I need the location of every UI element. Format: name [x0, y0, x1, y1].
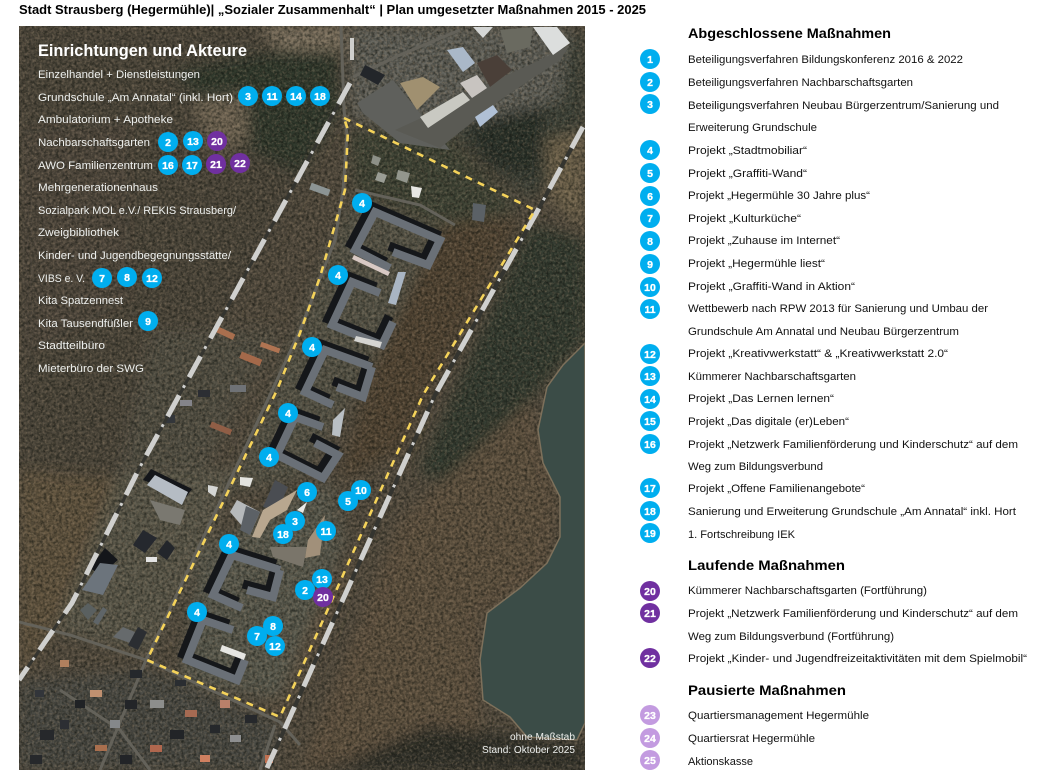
west commercial buildings — [80, 469, 192, 650]
item 16 — [640, 434, 1018, 473]
item 21 — [640, 603, 1018, 643]
item 24 — [640, 728, 815, 748]
item 24: Quartiersrat Hegermühle — [688, 733, 815, 745]
item 9: Projekt „Hegermühle liest“ — [688, 258, 825, 270]
item 17: Projekt „Offene Familienangebote“ — [688, 483, 865, 495]
item 11: 11 — [644, 304, 656, 316]
item 24: 24 — [644, 733, 656, 745]
item 19 — [640, 523, 796, 543]
item 4 — [640, 140, 807, 160]
facility badges: 16 — [162, 160, 174, 172]
item 8: Projekt „Zuhause im Internet“ — [688, 235, 840, 247]
residential blocks — [183, 155, 486, 680]
item 19: 1. Fortschreibung IEK — [688, 529, 796, 541]
item 11 — [640, 299, 988, 338]
item 11: Wettbewerb nach RPW 2013 für Sanierung und Umbau der — [688, 303, 988, 315]
facility badges: 13 — [187, 136, 199, 148]
item 10: Projekt „Graffiti-Wand in Aktion“ — [688, 281, 855, 293]
item 25: Aktionskasse — [688, 756, 753, 768]
map markers: 12 — [269, 641, 281, 653]
item 3: Erweiterung Grundschule — [688, 122, 817, 134]
facility list: Einzelhandel + Dienstleistungen — [38, 69, 200, 81]
panel: paused measures — [640, 682, 869, 770]
panel: aerial map — [19, 26, 585, 770]
map markers: 4 — [194, 607, 200, 619]
item 13 — [640, 366, 856, 386]
facility badges: 20 — [211, 136, 223, 148]
item 22: 22 — [644, 653, 656, 665]
facility list: Mieterbüro der SWG — [38, 363, 144, 375]
map markers: 20 — [317, 592, 329, 604]
item 23 — [640, 705, 869, 725]
item 21: 21 — [644, 608, 656, 620]
item 7: Projekt „Kulturküche“ — [688, 213, 801, 225]
item 12: Projekt „Kreativwerkstatt“ & „Kreativwerkstatt 2.0“ — [688, 348, 948, 360]
item 2: 2 — [647, 77, 653, 89]
facility badges: 21 — [210, 159, 222, 171]
facility badges: 17 — [186, 160, 198, 172]
map markers: 4 — [266, 452, 272, 464]
facility badges — [92, 86, 330, 331]
roads — [19, 26, 460, 770]
item 3: 3 — [647, 99, 653, 111]
heading: Pausierte Maßnahmen: Pausierte Maßnahmen — [688, 682, 846, 698]
heading: Einrichtungen und Akteure: Einrichtungen und Akteure — [38, 42, 247, 60]
item 20 — [640, 581, 927, 601]
facility list: Kita Spatzennest — [38, 295, 123, 307]
heading: Abgeschlossene Maßnahmen: Abgeschlossene Maßnahmen — [688, 25, 891, 41]
map note: Stand: Oktober 2025 — [482, 745, 575, 756]
item 12 — [640, 344, 948, 364]
facility list: Nachbarschaftsgarten — [38, 137, 150, 149]
item 6: Projekt „Hegermühle 30 Jahre plus“ — [688, 190, 870, 202]
facility badges: 12 — [146, 273, 158, 285]
item 8 — [640, 231, 840, 251]
facility badges: 8 — [124, 272, 130, 284]
item 3 — [640, 94, 999, 134]
item 13: Kümmerer Nachbarschaftsgarten — [688, 371, 856, 383]
facility list: Mehrgenerationenhaus — [38, 182, 159, 194]
facility list: Kita Tausendfüßler — [38, 318, 133, 330]
panel: ongoing measures — [640, 557, 1027, 668]
facility list: Ambulatorium + Apotheke — [38, 114, 173, 126]
item 10 — [640, 277, 855, 297]
item 16: Projekt „Netzwerk Familienförderung und Kinderschutz“ auf dem — [688, 439, 1018, 451]
item 5: Projekt „Graffiti-Wand“ — [688, 168, 807, 180]
map markers: 7 — [254, 631, 260, 643]
item 13: 13 — [644, 371, 656, 383]
item 18: Sanierung und Erweiterung Grundschule „Am Annatal“ inkl. Hort — [688, 506, 1016, 518]
panel: completed measures — [640, 25, 1018, 543]
facility list: Zweigbibliothek — [38, 227, 120, 239]
item 10: 10 — [644, 282, 656, 294]
facility list: VIBS e. V. — [38, 273, 85, 285]
facility badges: 3 — [245, 91, 251, 103]
heading: Laufende Maßnahmen: Laufende Maßnahmen — [688, 557, 845, 573]
map markers: 5 — [345, 496, 351, 508]
item 14 — [640, 389, 834, 409]
item 4: 4 — [647, 145, 653, 157]
facility badges: 2 — [165, 137, 171, 149]
item 6 — [640, 186, 870, 206]
facility badges: 22 — [234, 158, 246, 170]
facility list: Kinder- und Jugendbegegnungsstätte/ — [38, 250, 232, 262]
central school and shops — [208, 477, 325, 567]
map markers: 10 — [355, 485, 367, 497]
facility list: Grundschule „Am Annatal“ (inkl. Hort) — [38, 92, 233, 104]
item 25 — [640, 750, 753, 770]
lake — [480, 343, 585, 740]
settlements — [30, 326, 280, 764]
item 7: 7 — [647, 213, 653, 225]
map markers: 8 — [270, 621, 276, 633]
facility list — [38, 69, 237, 375]
facility list: Stadtteilbüro — [38, 340, 105, 352]
facility list: Sozialpark MOL e.V./ REKIS Strausberg/ — [38, 205, 237, 217]
facility badges: 14 — [290, 91, 302, 103]
panel: facilities and actors — [38, 42, 330, 375]
item 11: Grundschule Am Annatal und Neubau Bürgerzentrum — [688, 326, 959, 338]
item 7 — [640, 208, 801, 228]
item 15: 15 — [644, 416, 656, 428]
facility list: AWO Familienzentrum — [38, 160, 153, 172]
item 21: Weg zum Bildungsverbund (Fortführung) — [688, 631, 894, 643]
item 5 — [640, 163, 807, 183]
railway line west (white dashes) — [19, 38, 352, 680]
item 1 — [640, 49, 963, 69]
facility badges: 7 — [99, 273, 105, 285]
item 8: 8 — [647, 236, 653, 248]
item 5: 5 — [647, 168, 653, 180]
map markers: 4 — [285, 408, 291, 420]
item 25: 25 — [644, 755, 656, 767]
map markers: 4 — [309, 342, 315, 354]
item 16: 16 — [644, 439, 656, 451]
item 17: 17 — [644, 483, 656, 495]
item 9: 9 — [647, 259, 653, 271]
item 6: 6 — [647, 191, 653, 203]
map markers: 13 — [316, 574, 328, 586]
item 9 — [640, 254, 825, 274]
item 15 — [640, 411, 849, 431]
boundary: dashed yellow project area — [147, 118, 535, 717]
facility badges: 11 — [266, 91, 278, 103]
map markers: 6 — [304, 487, 310, 499]
item 14: 14 — [644, 394, 656, 406]
item 22 — [640, 648, 1027, 668]
item 20: 20 — [644, 586, 656, 598]
item 19: 19 — [644, 528, 656, 540]
item 3: Beteiligungsverfahren Neubau Bürgerzentrum/Sanierung und — [688, 100, 999, 112]
map markers — [187, 193, 372, 656]
item 22: Projekt „Kinder- und Jugendfreizeitaktivitäten mit dem Spielmobil“ — [688, 653, 1027, 665]
item 20: Kümmerer Nachbarschaftsgarten (Fortführung) — [688, 585, 927, 597]
map markers: 18 — [277, 529, 289, 541]
item 18 — [640, 501, 1016, 521]
item 1: 1 — [647, 54, 653, 66]
title: Stadt Strausberg (Hegermühle)| „Sozialer Zusammenhalt“ | Plan umgesetzter Maßnahmen 2015 - 2025 — [19, 3, 646, 17]
item 21: Projekt „Netzwerk Familienförderung und Kinderschutz“ auf dem — [688, 608, 1018, 620]
map markers: 4 — [335, 270, 341, 282]
item 2: Beteiligungsverfahren Nachbarschaftsgarten — [688, 77, 913, 89]
item 2 — [640, 72, 913, 92]
map markers: 3 — [292, 516, 298, 528]
item 23: 23 — [644, 710, 656, 722]
map note — [482, 732, 575, 753]
item 15: Projekt „Das digitale (er)Leben“ — [688, 416, 849, 428]
map markers: 4 — [359, 198, 365, 210]
map note: ohne Maßstab — [510, 732, 575, 743]
map markers: 2 — [302, 585, 308, 597]
north commercial buildings — [357, 27, 570, 150]
facility badges: 9 — [145, 316, 151, 328]
railway line east (white dashes) — [267, 127, 583, 768]
item 23: Quartiersmanagement Hegermühle — [688, 710, 869, 722]
item 12: 12 — [644, 349, 656, 361]
item 18: 18 — [644, 506, 656, 518]
map markers: 11 — [320, 526, 332, 538]
map markers: 4 — [226, 539, 232, 551]
facility badges: 18 — [314, 91, 326, 103]
item 17 — [640, 478, 865, 498]
item 4: Projekt „Stadtmobiliar“ — [688, 145, 807, 157]
item 1: Beteiligungsverfahren Bildungskonferenz 2016 & 2022 — [688, 54, 963, 66]
item 14: Projekt „Das Lernen lernen“ — [688, 393, 834, 405]
item 16: Weg zum Bildungsverbund — [688, 461, 823, 473]
